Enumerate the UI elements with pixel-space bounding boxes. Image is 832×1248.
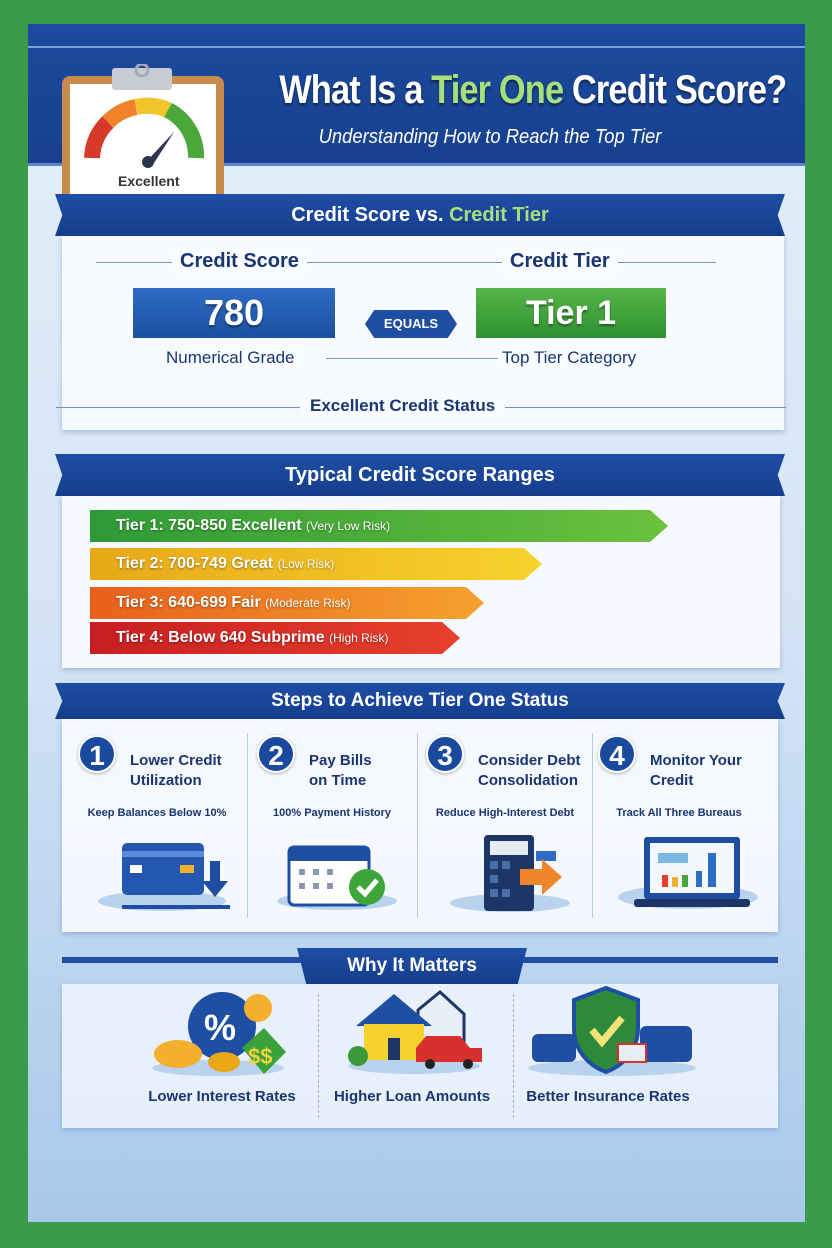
step 3: 3 (437, 740, 453, 771)
panel: score vs tier (62, 236, 784, 430)
box: tier 1: Tier 1 (526, 294, 616, 332)
step 4: Monitor Your (650, 752, 742, 769)
step 2: on Time (309, 772, 366, 789)
step 3 (424, 734, 581, 912)
benefit: better insurance (526, 986, 696, 1105)
bar: tier 4 (90, 622, 460, 654)
step 3: Reduce High-Interest Debt (436, 807, 574, 819)
banner: ranges (55, 454, 785, 496)
box: 780: 780 (204, 292, 264, 333)
bar: tier 1 (90, 510, 668, 542)
benefit: higher loan: Higher Loan Amounts (334, 1088, 490, 1105)
step 2: 2 (268, 740, 284, 771)
divider line why it matters (62, 957, 778, 963)
step 1: Keep Balances Below 10% (88, 807, 226, 819)
bar: tier 3: Tier 3: 640-699 Fair (Moderate Risk) (116, 594, 350, 611)
bar: tier 2: Tier 2: 700-749 Great (Low Risk) (116, 555, 334, 572)
step 1: Lower Credit (130, 752, 222, 769)
bar: tier 3 (90, 587, 484, 619)
step 1 (76, 734, 230, 911)
banner: why it matters (297, 948, 527, 984)
equals tag (365, 310, 457, 338)
step 1: Utilization (130, 772, 202, 789)
icon: clipboard gauge: Excellent (118, 173, 180, 189)
step 2: Pay Bills (309, 752, 372, 769)
panel: ranges (62, 496, 780, 668)
bar: tier 1: Tier 1: 750-850 Excellent (Very Low Risk) (116, 517, 390, 534)
step 1: 1 (89, 740, 105, 771)
label: numerical grade: Numerical Grade (166, 348, 294, 367)
equals tag: EQUALS (384, 316, 438, 331)
banner: credit score vs tier: Credit Score vs. Credit Tier (291, 204, 549, 226)
text: excellent status: Excellent Credit Status (310, 396, 495, 415)
bar: tier 2 (90, 548, 542, 580)
benefit: lower interest (148, 992, 296, 1105)
benefit: lower interest: % (204, 1007, 236, 1048)
banner: steps (55, 683, 785, 719)
banner: credit score vs tier (55, 194, 785, 236)
banner: ranges: Typical Credit Score Ranges (285, 464, 555, 486)
benefit: better insurance: Better Insurance Rates (526, 1088, 690, 1105)
box: tier 1 (476, 288, 666, 338)
subtitle: Understanding How to Reach the Top Tier (319, 126, 661, 148)
step 4: Credit (650, 772, 693, 789)
step 3: Consider Debt (478, 752, 581, 769)
step 4: 4 (609, 740, 625, 771)
heading: credit score: Credit Score (180, 250, 299, 272)
benefit: lower interest: Lower Interest Rates (148, 1088, 296, 1105)
heading: credit tier: Credit Tier (510, 250, 610, 272)
benefit: lower interest: $$ (248, 1044, 272, 1069)
step 2: 100% Payment History (273, 807, 391, 819)
header band (28, 24, 805, 166)
title: What Is a Tier One Credit Score? (279, 68, 786, 112)
step 3: Consolidation (478, 772, 578, 789)
icon: clipboard gauge (62, 64, 224, 194)
box: 780 (133, 288, 335, 338)
step 4: Track All Three Bureaus (616, 807, 742, 819)
bar: tier 4: Tier 4: Below 640 Subprime (High Risk) (116, 629, 388, 646)
step 4 (596, 734, 758, 909)
panel: why it matters (62, 984, 778, 1128)
banner: steps: Steps to Achieve Tier One Status (271, 690, 569, 711)
banner: why it matters: Why It Matters (347, 955, 477, 976)
benefit: higher loan (334, 990, 490, 1105)
label: top tier category: Top Tier Category (502, 348, 636, 367)
step 2 (255, 734, 397, 910)
panel: steps (62, 719, 778, 932)
